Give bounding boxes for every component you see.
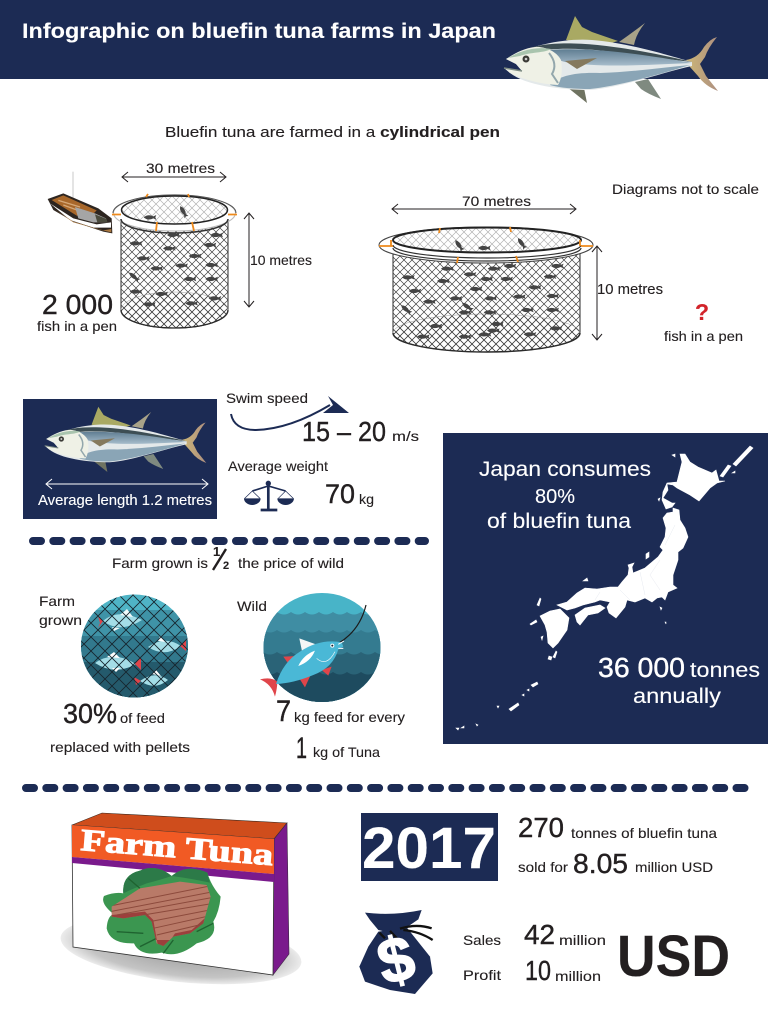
net cylinder [112, 194, 237, 328]
label: USD: USD [617, 924, 730, 989]
heading: cylindrical pen: Bluefin tuna are farmed in a cylindrical pen [165, 125, 500, 141]
note: not to scale: Diagrams not to scale [612, 181, 759, 197]
stat: average weight [228, 458, 374, 510]
arrow: 30 metres [122, 172, 226, 182]
heading: half price: the price of wild [238, 555, 344, 571]
heading: half price [112, 544, 344, 572]
label: 10 metres: 10 metres [597, 282, 663, 298]
icon: money bag: $ [371, 922, 422, 999]
icon: money bag [359, 910, 433, 999]
label: farm grown: Farm [39, 593, 75, 609]
stat: sales: Sales [463, 932, 501, 948]
box label: Farm Tuna [79, 822, 275, 872]
label: 30 metres: 30 metres [146, 160, 215, 176]
text: Japan consumes: Japan consumes [479, 458, 651, 481]
arrow: 10 metres [592, 246, 602, 340]
heading: half price: 2 [223, 560, 229, 572]
stat: sales [463, 919, 606, 950]
diagram: small pen [37, 160, 312, 334]
stat: 2 000 fish: 2 000 [42, 289, 113, 320]
stat: swim speed [226, 390, 419, 447]
heading: half price: Farm grown is [112, 555, 208, 571]
label: grown: grown [39, 612, 82, 628]
stat: 8.05 million: million USD [635, 859, 713, 875]
spinach and steak [103, 868, 221, 954]
stat: 7 kg feed [276, 695, 405, 728]
stat: 1 kg tuna: 1 [296, 732, 307, 765]
panel: farm grown [39, 593, 190, 755]
stat: 270 tonnes [518, 812, 717, 843]
stat: swim speed: 15 – 20 [302, 416, 386, 447]
badge: 2017: 2017 [362, 816, 496, 881]
text: Japan consumes: of bluefin tuna [487, 510, 631, 533]
text: 36 000 tonnes: 36 000 [598, 652, 685, 683]
stat: sales: 42 [524, 919, 555, 950]
shadow [57, 906, 305, 994]
stat: 30%: 30% [63, 698, 117, 729]
text: Japan consumes: 80% [535, 486, 575, 508]
text: 36 000 tonnes: tonnes [690, 659, 760, 682]
stat: unknown fish: fish in a pen [664, 328, 743, 344]
stat: unknown fish [664, 299, 743, 344]
icon: farm tuna box [57, 813, 305, 994]
stat: 2 000 fish [37, 289, 117, 334]
label: wild: Wild [237, 598, 267, 614]
stat: 8.05 million: sold for [518, 859, 568, 875]
fish inside pen [128, 205, 223, 307]
stat: 8.05 million: 8.05 [573, 848, 628, 879]
stat: 1 kg tuna: kg of Tuna [313, 744, 380, 760]
label: average length: Average length 1.2 metres [38, 493, 212, 509]
stat: 270 tonnes: 270 [518, 812, 564, 843]
fish inside pen [400, 237, 564, 339]
stat: 30%: of feed [120, 710, 165, 726]
stat: 30% [50, 698, 190, 755]
stat: 2 000 fish: fish in a pen [37, 318, 117, 334]
text: 36 000 tonnes [598, 652, 760, 708]
stat: 8.05 million [518, 848, 713, 879]
icon: scales [244, 481, 294, 510]
panel: Japan consumption [443, 433, 768, 744]
label: 70 metres: 70 metres [462, 193, 531, 209]
stat: profit: Profit [463, 967, 501, 983]
stat: 270 tonnes: tonnes of bluefin tuna [571, 825, 717, 841]
stat: 1 kg tuna [296, 732, 380, 765]
icon: tuna [45, 407, 206, 472]
arrow: length [46, 479, 208, 489]
stat: profit: million [555, 968, 601, 984]
panel: tuna length [23, 399, 217, 519]
panel: wild [237, 593, 405, 765]
stat: sales: million [559, 932, 606, 948]
stat: average weight: kg [359, 491, 374, 507]
icon: boat [48, 172, 112, 233]
text: Japan consumes [479, 458, 651, 533]
icon: wild tuna on hook [260, 593, 389, 703]
stat: average weight: 70 [325, 479, 355, 509]
text: 36 000 tonnes: annually [633, 685, 722, 708]
stat: swim speed: m/s [392, 428, 419, 444]
header band [0, 0, 768, 79]
heading: half price: 1 [213, 544, 220, 559]
icon: farmed fish in net [81, 594, 188, 698]
stat: 7 kg feed: 7 [276, 695, 291, 728]
stat: swim speed: Swim speed [226, 390, 308, 406]
stat: unknown fish: ? [695, 299, 709, 325]
map: Japan [456, 446, 753, 730]
arrow: 70 metres [392, 204, 576, 214]
stat: 7 kg feed: kg feed for every [294, 709, 405, 725]
stat: profit [463, 955, 601, 986]
label: 10 metres: 10 metres [250, 252, 312, 268]
stat: profit: 10 [525, 955, 551, 986]
stat: 30%: replaced with pellets [50, 739, 190, 755]
arrow: 10 metres [244, 213, 254, 307]
net cylinder [379, 227, 593, 352]
icon: header tuna [504, 16, 718, 103]
diagram: large pen [379, 181, 759, 352]
title: Infographic on bluefin tuna farms in Japan [22, 20, 496, 43]
fish [260, 638, 344, 697]
stat: average weight: Average weight [228, 458, 328, 474]
